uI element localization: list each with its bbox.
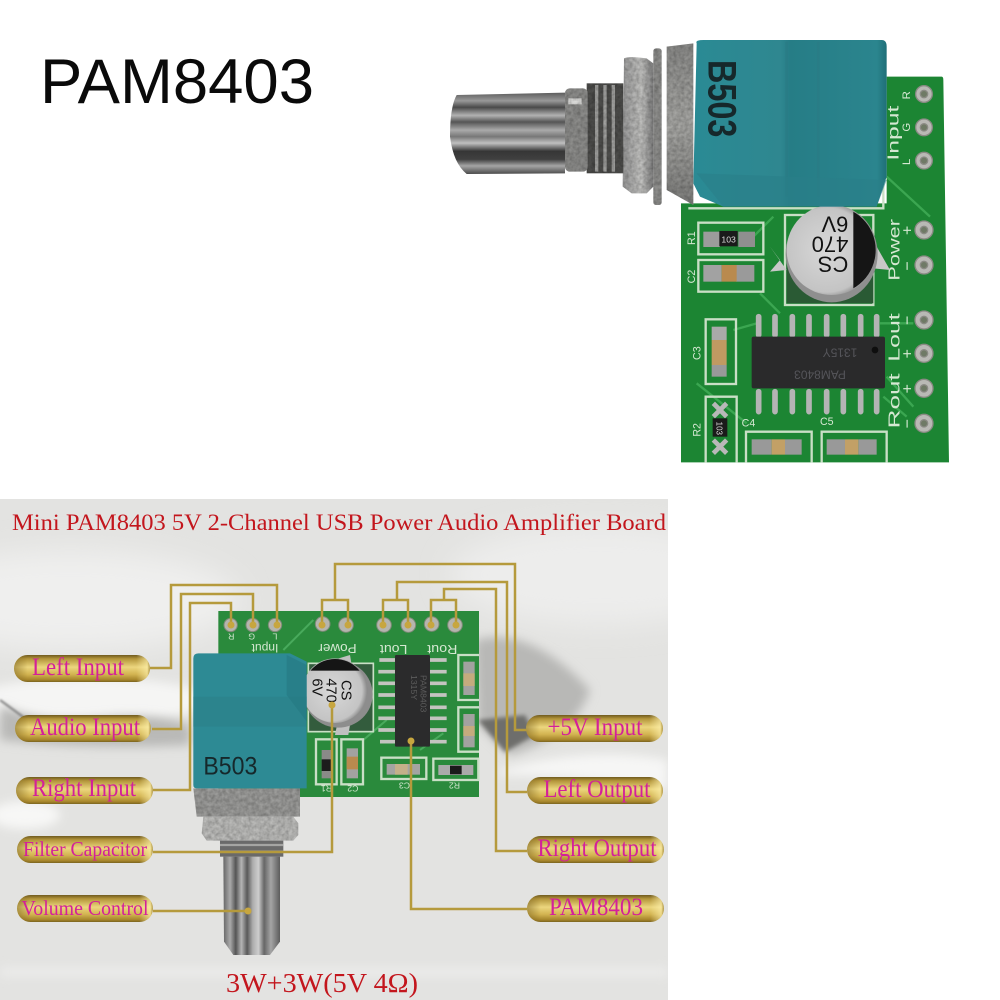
chip PAM8403: PAM8403: [794, 368, 846, 382]
silk labels: Power: [318, 641, 357, 655]
potentiometer body: [693, 40, 887, 207]
label: Left Input: Left Input: [32, 654, 124, 681]
capacitor: [300, 655, 373, 735]
label: Right Output: Right Output: [538, 835, 657, 862]
silkscreen labels: C4: [742, 418, 755, 430]
IC chip: [395, 655, 430, 747]
capacitor: 6V: [309, 678, 325, 696]
silkscreen labels: R2: [692, 423, 704, 437]
nut: [202, 817, 298, 841]
electrolytic capacitor: 470: [812, 232, 848, 257]
panel background: [0, 499, 668, 1000]
label: Right Input: Right Input: [32, 775, 136, 802]
PCB board: [681, 77, 949, 462]
IC chip: PAM8403: [419, 675, 429, 713]
label: Volume Control: Volume Control: [22, 896, 149, 920]
green board with chip and capacitor: [218, 611, 479, 797]
silk outlines and parts: R2: [449, 780, 460, 790]
silkscreen labels: +: [900, 349, 917, 358]
silk labels: Lout: [379, 642, 407, 656]
heading: Mini PAM8403 5V 2-Channel USB Power Audio Amplifier Board: [12, 510, 666, 536]
silkscreen labels: −: [900, 316, 917, 325]
IC pins: [759, 317, 877, 412]
silkscreen labels: C2: [686, 270, 698, 283]
silkscreen labels: C3: [692, 346, 704, 360]
silkscreen labels: Rout: [886, 372, 903, 428]
B503 print: B503: [699, 60, 743, 137]
label: PAM8403: PAM8403: [549, 894, 643, 921]
IC pins: [378, 660, 447, 742]
SMD components: 103: [715, 422, 724, 436]
product photo: potentiometer amplifier board: [450, 40, 949, 462]
electrolytic capacitor: CS: [818, 252, 848, 277]
capacitor: 470: [323, 678, 339, 703]
silkscreen outlines: [688, 183, 887, 462]
metal housing: [193, 788, 300, 817]
silkscreen labels: +: [900, 384, 917, 393]
potentiometer metal bushing and nut: [565, 43, 693, 205]
silkscreen labels: +: [900, 226, 917, 235]
silkscreen labels: C5: [820, 416, 834, 428]
silkscreen labels: G: [901, 123, 913, 132]
silkscreen labels: R1: [686, 231, 698, 245]
label: Filter Capacitor: Filter Capacitor: [23, 837, 147, 861]
chip PAM8403: [752, 337, 885, 388]
silkscreen labels: Input: [885, 105, 902, 161]
knurled shaft: [223, 857, 280, 955]
silk labels: L: [272, 631, 277, 641]
silkscreen labels: L: [901, 159, 913, 165]
silk outlines and parts: [308, 655, 479, 794]
capacitor: CS: [338, 680, 354, 701]
title: PAM8403: PAM8403: [40, 47, 314, 117]
label: Left Output: Left Output: [544, 776, 651, 803]
label: +5V Input: +5V Input: [548, 714, 643, 741]
electrolytic capacitor: 6V: [821, 212, 848, 237]
silk outlines and parts: R1: [321, 784, 332, 794]
silk labels: Input: [251, 641, 278, 655]
silkscreen labels: −: [900, 261, 917, 271]
silk labels: Rout: [427, 642, 457, 656]
pads: [224, 617, 462, 632]
chip PAM8403: 1315Y: [823, 345, 857, 359]
silkscreen labels: −: [900, 419, 917, 428]
potentiometer, front view: [193, 653, 307, 955]
solder pads: [915, 86, 933, 432]
silk labels: G: [248, 631, 255, 641]
electrolytic capacitor: [770, 203, 890, 302]
connector end dots: [228, 622, 460, 914]
silkscreen labels: R: [901, 91, 913, 99]
teal housing: [193, 653, 307, 788]
B503 print: B503: [203, 753, 257, 780]
label: Audio Input: Audio Input: [30, 714, 140, 741]
knurled shaft: [450, 93, 565, 174]
silk outlines and parts: C3: [399, 780, 410, 790]
SMD components: 103: [721, 234, 736, 244]
silkscreen labels: Power: [886, 218, 903, 281]
SMD components: [703, 231, 877, 455]
silk outlines and parts: C2: [347, 784, 358, 794]
silkscreen labels: [686, 91, 917, 437]
IC chip: 1315Y: [409, 675, 419, 700]
silk labels: [228, 634, 456, 654]
silk labels: R: [228, 631, 234, 641]
connector lines: [150, 564, 527, 911]
panel: wiring diagram: [0, 499, 668, 1000]
power rating caption: 3W+3W(5V 4Ω): [226, 968, 418, 998]
silkscreen labels: Lout: [886, 312, 903, 362]
